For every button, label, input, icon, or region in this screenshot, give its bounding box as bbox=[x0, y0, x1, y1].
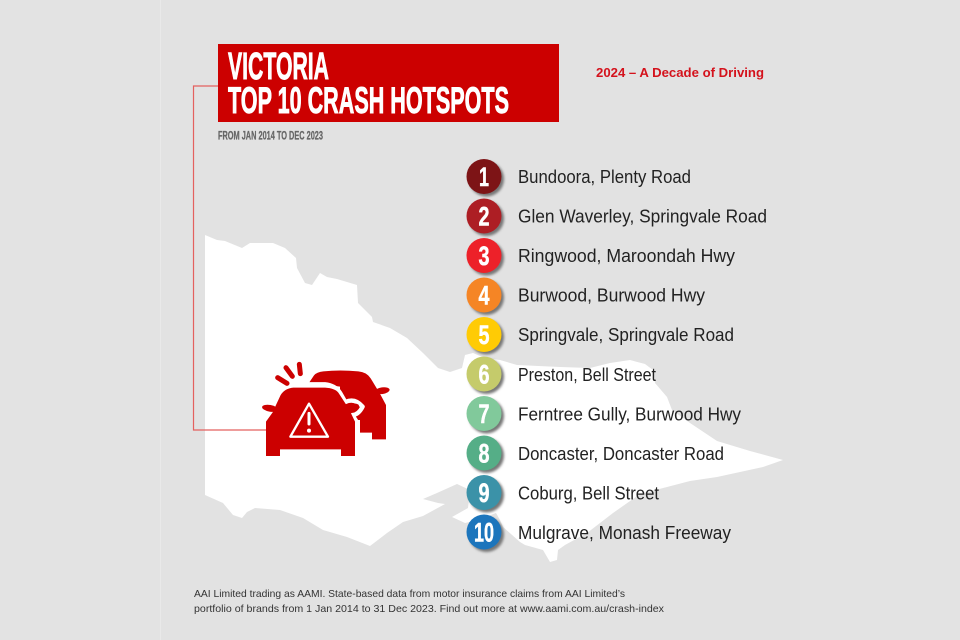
rank 7 bbox=[466, 396, 741, 434]
date range subtitle: FROM JAN 2014 TO DEC 2023 bbox=[218, 130, 323, 142]
rank 6 bbox=[466, 356, 656, 394]
title banner bbox=[218, 44, 559, 122]
rank 10: 10 bbox=[474, 518, 494, 548]
rank 3: Ringwood, Maroondah Hwy bbox=[518, 246, 735, 266]
rank 9: 9 bbox=[478, 478, 490, 508]
rank 1: 1 bbox=[479, 162, 489, 192]
footnote: portfolio of brands from 1 Jan 2014 to 31 Dec 2023. Find out more at www.aami.com.au/crash-index bbox=[194, 603, 665, 615]
rank 3: 3 bbox=[478, 241, 490, 271]
icon: crashed cars with warning bbox=[262, 364, 390, 456]
rank 4: Burwood, Burwood Hwy bbox=[518, 286, 705, 306]
rank 5: 5 bbox=[478, 320, 490, 350]
rank 4: 4 bbox=[478, 280, 490, 310]
rank 7: 7 bbox=[478, 399, 490, 429]
rank 8 bbox=[466, 436, 724, 473]
footnote: AAI Limited trading as AAMI. State-based data from motor insurance claims from AAI Limited’s bbox=[194, 588, 625, 600]
rank 5: Springvale, Springvale Road bbox=[518, 325, 734, 345]
rank 9: Coburg, Bell Street bbox=[518, 484, 659, 504]
rank 8: 8 bbox=[478, 438, 490, 468]
rank 1 bbox=[466, 159, 691, 196]
footnote bbox=[194, 588, 665, 615]
title banner: VICTORIA bbox=[228, 46, 329, 88]
rank 10: Mulgrave, Monash Freeway bbox=[518, 523, 731, 543]
rank 2: Glen Waverley, Springvale Road bbox=[518, 206, 767, 226]
rank 1: Bundoora, Plenty Road bbox=[518, 167, 691, 187]
rank 4 bbox=[466, 278, 705, 315]
title banner: TOP 10 CRASH HOTSPOTS bbox=[228, 80, 509, 121]
rank 3 bbox=[466, 238, 735, 276]
rank 7: Ferntree Gully, Burwood Hwy bbox=[518, 404, 741, 424]
connector line bbox=[194, 86, 268, 430]
rank 6: 6 bbox=[478, 360, 490, 390]
rank 6: Preston, Bell Street bbox=[518, 365, 656, 385]
map of Victoria bbox=[205, 235, 783, 562]
rank 9 bbox=[466, 475, 659, 512]
rank 2: 2 bbox=[478, 202, 490, 232]
rank 10 bbox=[466, 514, 731, 552]
rank 2 bbox=[466, 198, 767, 236]
report name: 2024 – A Decade of Driving bbox=[596, 65, 764, 80]
rank 8: Doncaster, Doncaster Road bbox=[518, 444, 724, 464]
rank 5 bbox=[466, 317, 734, 354]
